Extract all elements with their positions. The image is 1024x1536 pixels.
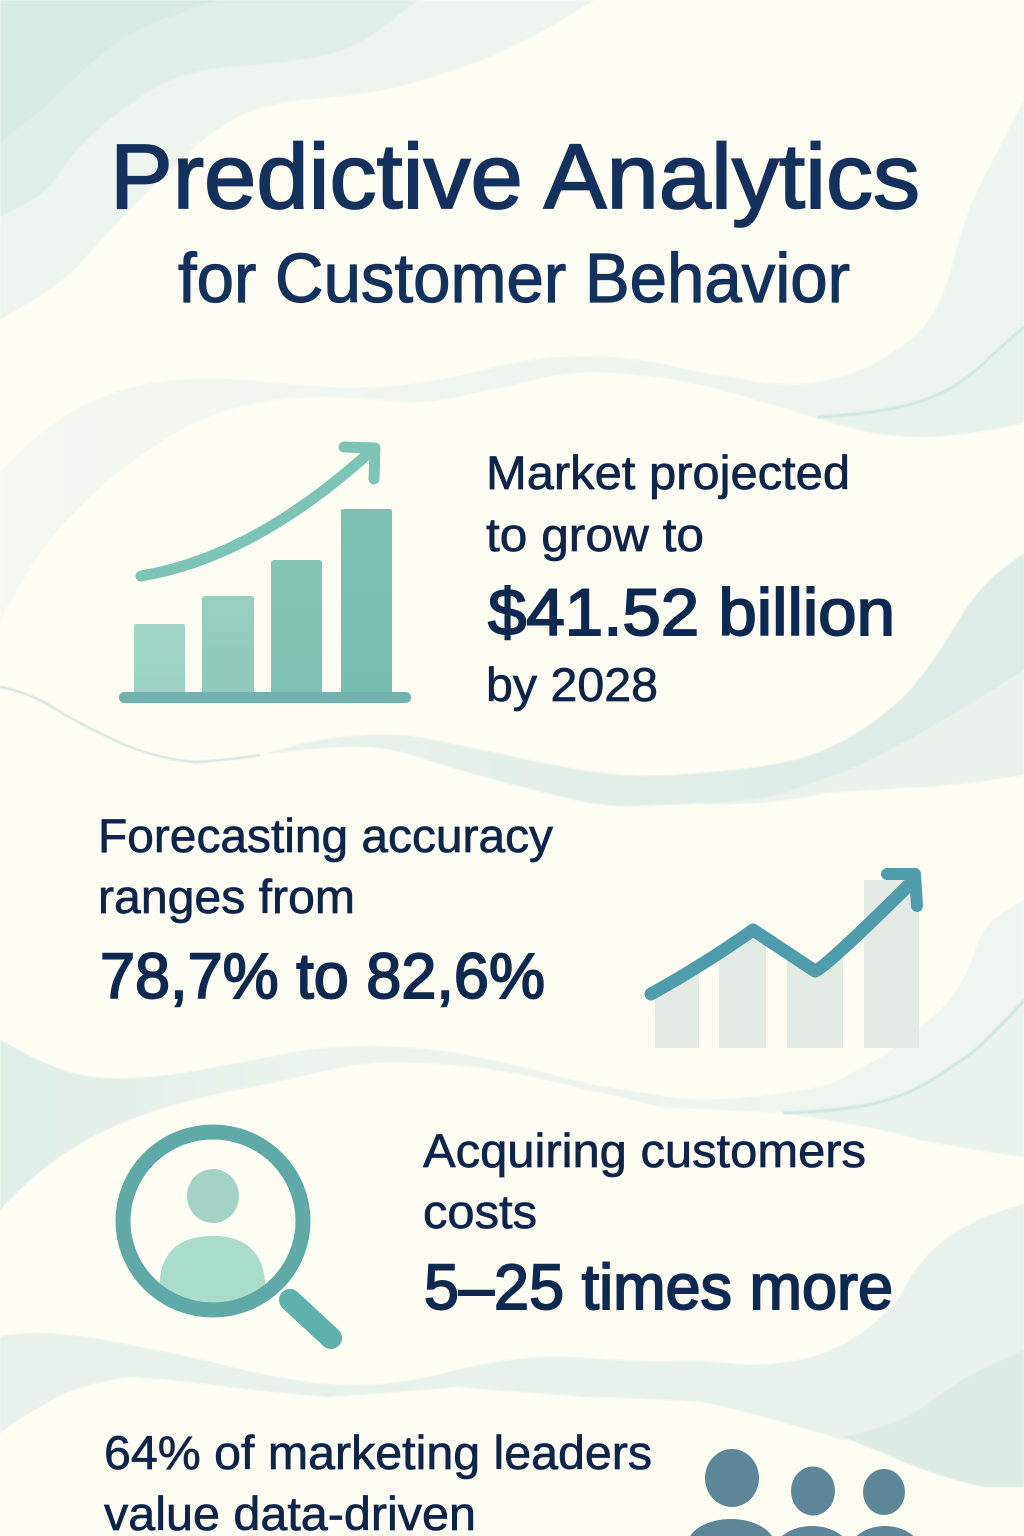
market value: $41.52 billion xyxy=(488,575,895,649)
market text line three: by 2028 xyxy=(486,658,658,711)
stat: forecasting accuracy xyxy=(98,809,554,1012)
icon: rising bar chart with arrow xyxy=(119,447,411,703)
forecasting text line two: ranges from xyxy=(98,870,355,923)
forecasting value: 78,7% to 82,6% xyxy=(100,940,545,1012)
title line two: for Customer Behavior xyxy=(178,239,850,317)
market text line one: Market projected xyxy=(486,446,850,499)
title xyxy=(110,126,920,317)
forecasting text line one: Forecasting accuracy xyxy=(98,809,554,862)
stat: marketing leaders xyxy=(104,1426,652,1536)
acquisition text line two: costs xyxy=(423,1185,537,1238)
stat: market growth xyxy=(486,446,895,711)
acquisition text line one: Acquiring customers xyxy=(423,1124,866,1177)
stat: acquisition cost xyxy=(423,1124,893,1323)
acquisition value: 5–25 times more xyxy=(424,1251,893,1323)
icon: magnifier over customer xyxy=(123,1132,331,1338)
icon: line trend over bars xyxy=(651,874,919,1048)
market text line two: to grow to xyxy=(486,508,704,561)
icon: group of people xyxy=(687,1449,921,1536)
title line one: Predictive Analytics xyxy=(110,126,920,228)
leaders text line one: 64% of marketing leaders xyxy=(104,1426,652,1479)
